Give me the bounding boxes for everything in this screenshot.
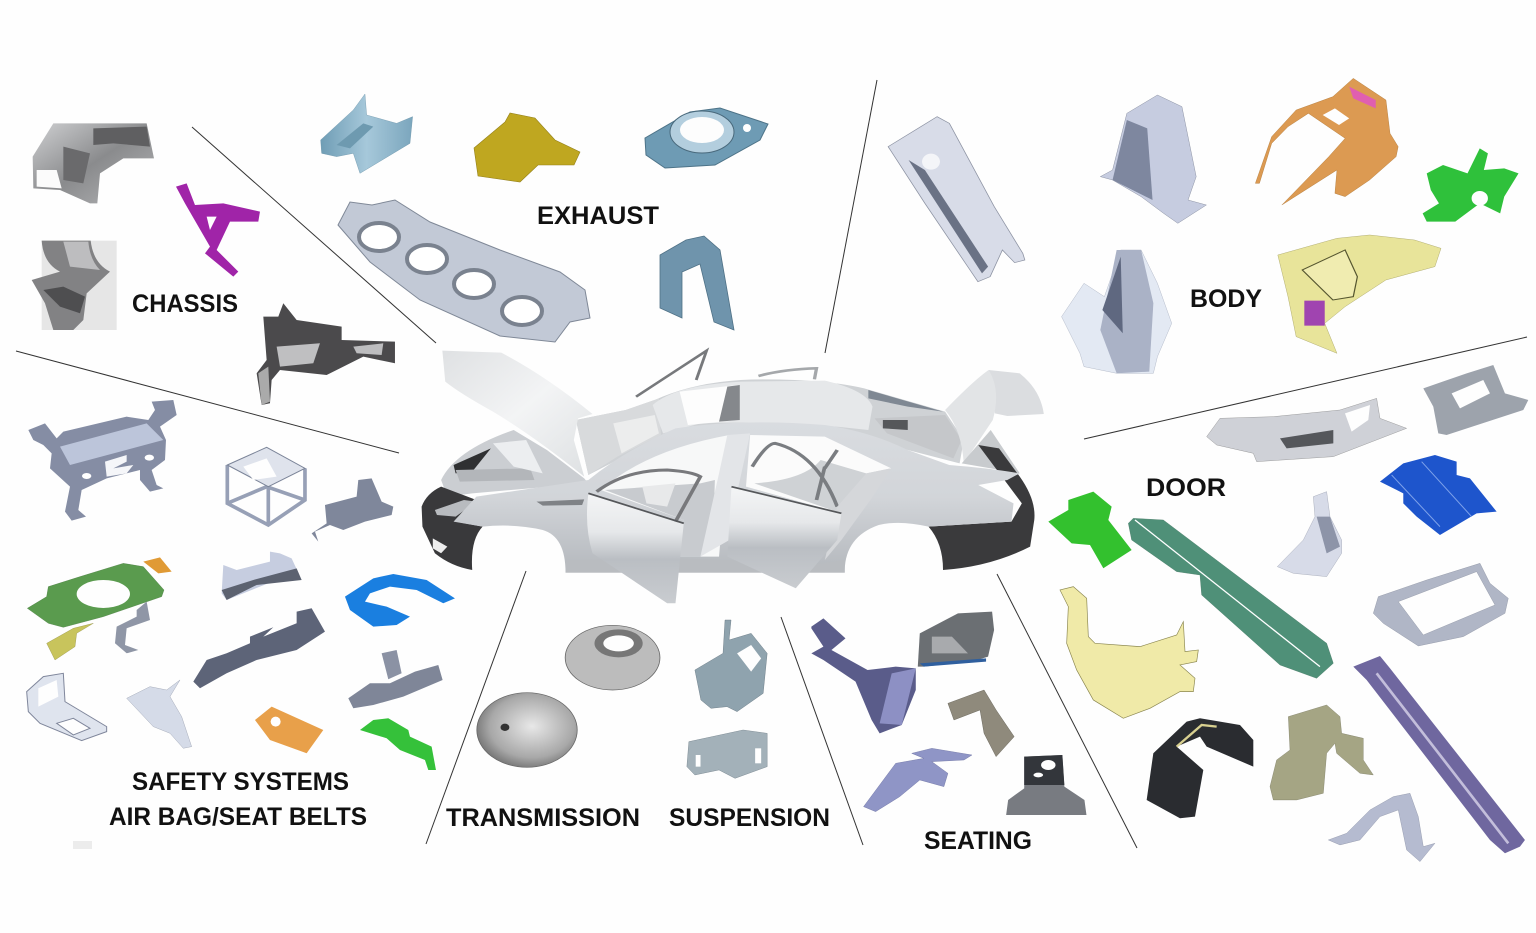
heading: safety systems: SAFETY SYSTEMS	[132, 768, 349, 796]
part: flange	[645, 108, 768, 168]
part: pale bracket left	[27, 673, 107, 741]
part: small housing	[312, 478, 393, 542]
rear cabin opening	[746, 435, 891, 513]
heading: safety systems: AIR BAG/SEAT BELTS	[109, 803, 367, 831]
part: faceted casting	[1062, 250, 1172, 373]
part: tall cap	[1100, 95, 1206, 223]
hood	[442, 351, 593, 477]
part: heat shield plate	[338, 200, 590, 342]
part: grey clip	[222, 552, 302, 600]
part: dished flange	[565, 625, 660, 690]
part: dark bracket	[257, 303, 395, 405]
central car body	[422, 351, 1044, 603]
part: grey clamp	[918, 612, 994, 667]
part: green bracket	[1423, 148, 1519, 222]
part: yellow shell	[1060, 587, 1198, 718]
heading: body: BODY	[1190, 285, 1262, 313]
part: dark tab bracket	[1006, 755, 1086, 815]
part: dark long housing	[193, 608, 325, 688]
black bumper front	[422, 487, 483, 570]
black bumper rear	[928, 445, 1035, 570]
main body	[454, 422, 1020, 573]
heading: chassis: CHASSIS	[132, 290, 238, 318]
part: dome	[477, 693, 577, 767]
corner mark	[73, 841, 92, 849]
part: long green beam	[1128, 518, 1333, 678]
panel: chassis	[32, 123, 395, 405]
b pillar	[700, 433, 750, 557]
part: orange block	[255, 707, 323, 753]
part: green plate	[27, 557, 172, 660]
heading: transmission: TRANSMISSION	[446, 804, 640, 832]
panel: seating, suspension, transmission	[446, 612, 1086, 855]
part: green hinge	[1048, 492, 1132, 568]
part: cube frame	[227, 447, 305, 525]
front door	[587, 493, 684, 603]
heading: door: DOOR	[1146, 474, 1226, 502]
part: white clip	[127, 680, 192, 748]
part: grey small housing	[348, 650, 443, 708]
sill	[566, 558, 845, 573]
heading: safety systems	[109, 768, 367, 831]
part: purple bracket	[176, 183, 260, 277]
part: violet bracket	[811, 618, 916, 733]
part: long casting	[1207, 398, 1407, 462]
trunk inner	[989, 370, 1044, 416]
part: cast strut	[32, 241, 117, 330]
part: grey frame	[1423, 365, 1528, 435]
part: bronze bracket	[948, 690, 1014, 757]
part: ring frame	[1373, 563, 1508, 646]
rear door	[727, 487, 841, 588]
part: long rail	[888, 117, 1025, 282]
part: khaki bracket	[1270, 705, 1373, 800]
part: green tab	[360, 718, 436, 770]
part: blue panel	[1380, 455, 1497, 535]
part: curved shell	[1277, 492, 1342, 577]
panel: exhaust	[321, 94, 768, 342]
part: flat bracket	[864, 748, 972, 812]
part: orange frame	[1255, 78, 1398, 205]
part: cast node	[33, 123, 154, 203]
part: blue channel	[321, 94, 413, 173]
part: pale hook	[115, 602, 150, 653]
part: yellow bracket	[474, 113, 580, 182]
part: blue u bracket	[345, 574, 455, 627]
part: bent strip	[1328, 793, 1435, 862]
panel: safety systems	[27, 400, 455, 831]
heading: exhaust: EXHAUST	[537, 202, 659, 230]
trunk lid	[945, 370, 996, 463]
panel: body	[888, 78, 1519, 373]
far side roof	[653, 381, 873, 433]
engine bay	[441, 430, 588, 497]
panel: door	[1048, 365, 1528, 862]
part: airbag housing	[28, 400, 177, 521]
front cabin opening	[601, 435, 729, 557]
part: clamp	[695, 620, 767, 712]
heading: seating: SEATING	[924, 827, 1032, 855]
part: pale yellow panel	[1278, 235, 1441, 353]
part: black bracket	[1147, 718, 1253, 818]
part: twin bracket	[687, 730, 767, 778]
part: blue clip	[660, 236, 734, 330]
part: long purple rail	[1353, 656, 1525, 853]
heading: suspension: SUSPENSION	[669, 804, 830, 832]
